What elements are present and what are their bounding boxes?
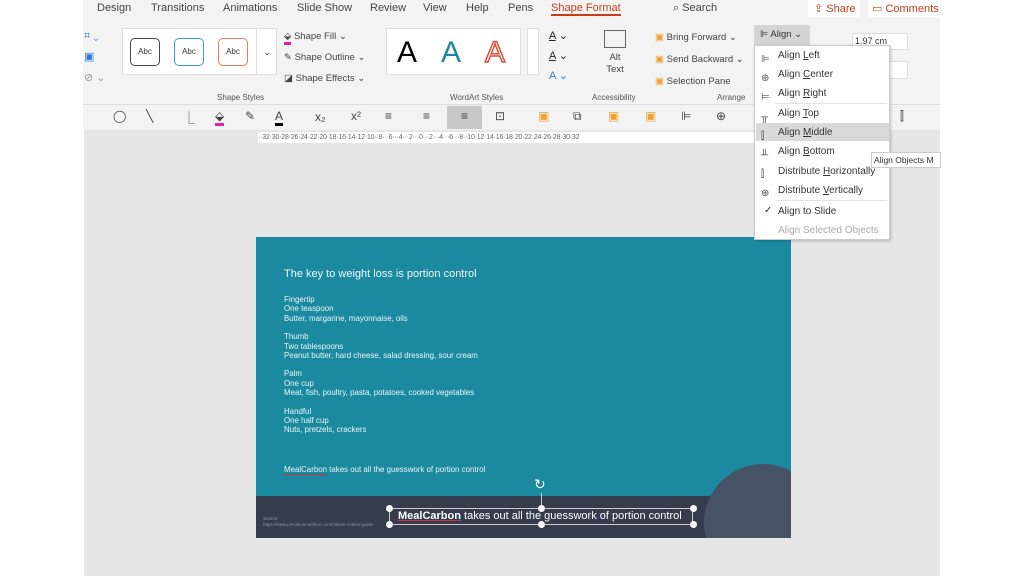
comments button [868,0,940,17]
alt text [604,30,626,75]
toolbar row: x² [351,109,361,123]
tab bar: Design [97,2,131,14]
slide [256,237,791,538]
tab bar: Review [370,2,406,14]
slide title: The key to weight loss is portion control [284,268,477,280]
portion list: Two tablespoons [284,342,343,351]
portion list: Meat, fish, poultry, pasta, potatoes, cooked vegetables [284,388,474,397]
tooltip: Align Objects M [874,155,934,165]
shape styles gallery: ⌄ [263,47,271,57]
portion list: Palm [284,369,302,378]
tab bar: Slide Show [297,2,352,14]
left ribbon icons: ⊘ ⌄ [84,72,106,84]
shape styles gallery: Abc [226,47,240,56]
text: WordArt Styles [450,93,503,102]
text fill icons: A ⌄ [549,50,568,62]
align dropdown menu: Align Selected Objects [778,225,879,236]
toolbar row: ⊫ [681,109,691,123]
workspace [84,130,940,576]
text: Arrange [717,93,745,102]
toolbar row: ⊡ [495,109,505,123]
toolbar row: ╲ [146,109,153,123]
selected text box [389,508,693,525]
align button [754,25,810,45]
toolbar row: ▣ [608,109,619,123]
ribbon background [83,0,940,130]
toolbar row: x₂ [315,110,326,124]
align dropdown menu: Align to Slide [778,206,836,217]
shape fill/outline/effects: ⬙ Shape Fill ⌄ [284,31,347,42]
align dropdown menu: ╨ [761,150,768,161]
tab bar: ⌕ Search [673,2,717,14]
wordart gallery: A [397,36,417,69]
tab bar: Animations [223,2,277,14]
source note: https://www.precisionnutrition.com/calorie-control-guide [263,522,373,527]
left ribbon icons: ▣ [84,51,94,63]
toolbar row: ⬙ [215,109,224,123]
tab bar: View [423,2,447,14]
slide: ↻ [534,476,546,492]
align dropdown menu: Align Top [778,108,819,119]
portion list: One teaspoon [284,304,334,313]
decorative circle [704,464,822,576]
align dropdown menu: ⊫ [761,54,770,65]
align dropdown menu [754,45,890,240]
shape styles gallery: Abc [138,47,152,56]
align dropdown menu: Align Right [778,88,826,99]
dark footer band [256,496,791,538]
toolbar row: ⊕ [716,109,726,123]
portion list [284,295,478,434]
toolbar row: ▣ [645,109,656,123]
align dropdown menu: ⊕ [761,73,769,84]
left ribbon icons [84,30,106,84]
alt text: Text [606,64,624,75]
ruler: ··32·30·28·26·24·22·20·18·16·14·12·10··8···6···4···2···0···2···4···6···8··10·12·14·16·18·20·22·24·26·28·30·32 [258,134,579,141]
tab bar [97,2,717,16]
align dropdown menu: Distribute Horizontally [778,166,875,177]
toolbar row: ⎿ [183,111,195,125]
shape fill/outline/effects: ✎ Shape Outline ⌄ [284,52,365,63]
portion list: One half cup [284,416,329,425]
tab bar: Transitions [151,2,204,14]
align dropdown menu: ⫿ [761,131,764,142]
portion list: Peanut butter, hard cheese, salad dressing, sour cream [284,351,478,360]
alt text: Alt [609,52,621,63]
arrange buttons: ▣ Bring Forward ⌄ [655,32,737,43]
portion list: One cup [284,379,314,388]
share button: ⇪ Share [814,3,856,15]
toolbar row: ≡ [385,109,392,123]
shape fill/outline/effects: ◪ Shape Effects ⌄ [284,73,365,84]
left ribbon icons: ⌗ ⌄ [84,30,98,42]
align dropdown menu: Align Center [778,69,833,80]
group labels: Shape Styles [217,93,264,102]
arrange buttons [655,32,744,87]
portion list: Thumb [284,332,309,341]
source note [263,516,373,527]
shape styles gallery [122,28,277,75]
toolbar row: ▣ [538,109,549,123]
align dropdown menu: Align Middle [778,127,832,138]
align dropdown menu: ⫿ [761,169,764,180]
toolbar row: ≡ [461,109,468,123]
size boxes [852,33,908,50]
align dropdown menu: ⊨ [761,92,770,103]
wordart gallery [386,28,521,75]
toolbar row [83,104,940,130]
share button [808,0,860,17]
align dropdown menu: ⊕ [761,188,769,199]
portion list: Handful [284,407,311,416]
align dropdown menu: Align Bottom [778,146,835,157]
tab bar: Pens [508,2,533,14]
tooltip [871,152,941,168]
text fill icons [549,30,568,82]
align dropdown menu: ╥ [761,112,768,123]
slide tagline: MealCarbon takes out all the guesswork of portion control [284,465,485,474]
source note: Source: [263,516,279,521]
arrange buttons: ▣ Send Backward ⌄ [655,54,744,65]
tab bar: Shape Format [551,2,621,14]
toolbar row: ≡ [423,109,430,123]
align dropdown menu: Align Left [778,50,820,61]
align dropdown menu: Distribute Vertically [778,185,863,196]
tab bar: Help [466,2,489,14]
toolbar row: A [275,109,283,123]
toolbar row: ⫿ [900,109,904,123]
arrange buttons: ▣ Selection Pane [655,76,731,87]
selected text box: MealCarbon takes out all the guesswork of portion control [398,510,682,522]
text fill icons: A ⌄ [549,30,568,42]
portion list: Fingertip [284,295,315,304]
portion list: Butter, margarine, mayonnaise, oils [284,314,408,323]
toolbar row: ✎ [245,109,255,123]
wordart gallery: A [485,36,505,69]
text: Accessibility [592,93,636,102]
align button: ⊫ Align ⌄ [760,29,802,40]
toolbar row: ⧉ [573,109,582,123]
text fill icons: A ⌄ [549,70,568,82]
size boxes: 1.97 cm [855,36,887,46]
wordart gallery: A [441,36,461,69]
toolbar row: ◯ [113,109,126,123]
shape styles gallery: Abc [182,47,196,56]
comments button: ▭ Comments [872,3,939,15]
ruler [258,132,760,143]
portion list: Nuts, pretzels, crackers [284,425,366,434]
align dropdown menu: ✓ [764,205,772,216]
shape fill/outline/effects [284,31,365,84]
